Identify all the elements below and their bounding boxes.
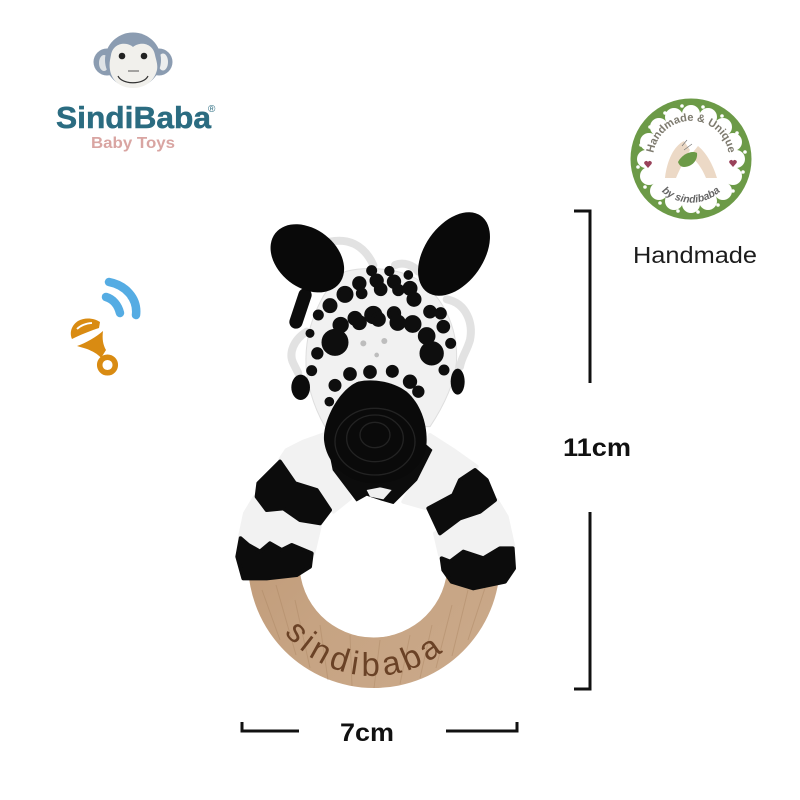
height dimension bracket (574, 211, 590, 689)
wooden ring (249, 575, 498, 688)
icon: hearts (644, 160, 737, 168)
right upper white band (403, 435, 477, 508)
icon: rattle with sound waves (71, 282, 136, 373)
rattle cone (77, 331, 106, 358)
zebra head (257, 199, 505, 483)
rattle body (71, 318, 115, 373)
engraved wood text: sindibaba (286, 624, 443, 676)
rattle highlight (77, 323, 92, 329)
width label: 7cm (340, 719, 394, 747)
logo tagline: Baby Toys (91, 135, 175, 152)
registered mark: ® (208, 104, 216, 115)
teether toy: crochet zebra on wooden ring (235, 212, 516, 688)
badge curved text: Handmade & Unique (646, 113, 734, 152)
crochet ring cover (237, 433, 514, 588)
height label: 11cm (563, 434, 631, 462)
left ear (257, 210, 357, 306)
right ear (403, 199, 505, 309)
logo wordmark: SindiBaba (56, 100, 212, 135)
left black band (257, 462, 330, 523)
head pattern (307, 267, 455, 405)
rattle ring (100, 357, 115, 373)
head base (306, 269, 457, 427)
left upper white band (280, 433, 350, 512)
badge ring (630, 98, 752, 220)
width dimension bracket (242, 722, 517, 731)
right cuff (442, 548, 514, 588)
right black band (428, 470, 495, 533)
right white band (435, 500, 513, 560)
badge byline: by sindibaba (662, 186, 720, 203)
handmade badge (630, 98, 752, 220)
left cuff (237, 538, 312, 578)
icon: monkey head (94, 32, 172, 88)
rattle ball (71, 318, 100, 339)
head stitches (360, 338, 387, 357)
yarn loops (291, 241, 471, 373)
sound waves (106, 282, 136, 315)
muzzle rings (335, 408, 415, 475)
icon: hands holding leaf (665, 140, 717, 178)
muzzle (324, 380, 427, 483)
centre white patch (367, 487, 392, 499)
badge scalloped centre (636, 104, 747, 214)
wood grain (262, 585, 486, 688)
brand logo (56, 32, 216, 152)
centre black join (330, 440, 432, 503)
black tassels (291, 295, 465, 400)
handmade label: Handmade (633, 242, 757, 268)
left white band (240, 497, 320, 553)
